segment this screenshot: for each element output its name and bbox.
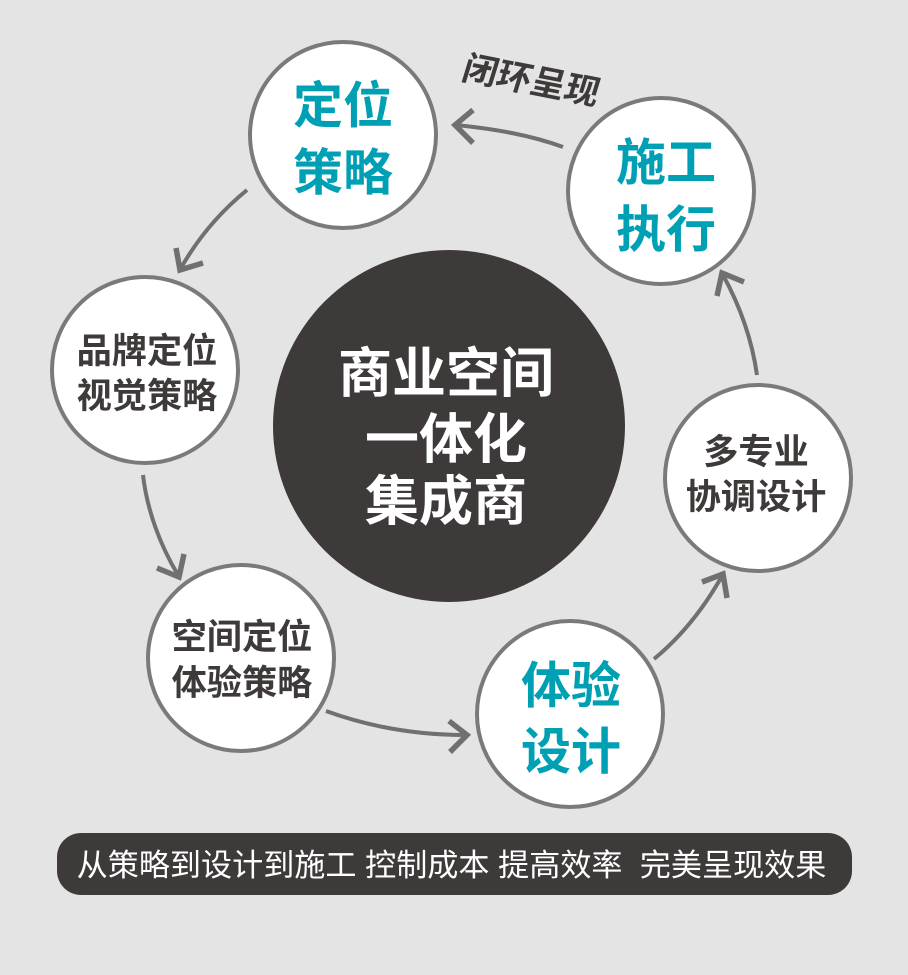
node: 施工执行	[568, 98, 754, 284]
central circle: 商业空间一体化集成商: 集成商	[365, 472, 527, 532]
bottom banner	[57, 833, 852, 895]
node: 品牌定位视觉策略: 品牌定位	[77, 332, 217, 371]
node: 施工执行: 施工	[616, 135, 716, 191]
node: 品牌定位视觉策略	[52, 277, 238, 463]
arrow: 品牌定位 to 空间定位	[143, 475, 184, 577]
central circle: 商业空间一体化集成商: 一体化	[365, 410, 527, 470]
node: 空间定位体验策略: 体验策略	[172, 664, 312, 703]
node: 空间定位体验策略	[148, 565, 334, 751]
node: 空间定位体验策略: 空间定位	[172, 618, 312, 657]
node: 多专业协调设计	[665, 385, 851, 571]
central circle: 商业空间一体化集成商: 商业空间	[338, 344, 554, 404]
node: 定位策略: 策略	[293, 145, 393, 201]
arrow: 体验设计 to 多专业	[654, 574, 727, 659]
node: 体验设计: 体验	[521, 658, 621, 714]
label: 闭环呈现: 闭环呈现	[458, 50, 604, 113]
node: 品牌定位视觉策略: 视觉策略	[77, 377, 217, 416]
node: 定位策略: 定位	[293, 78, 393, 134]
arrow: 空间定位 to 体验设计	[326, 711, 467, 752]
node: 施工执行: 执行	[616, 202, 716, 258]
node: 多专业协调设计: 多专业	[703, 433, 809, 472]
arrow: 多专业 to 施工执行	[717, 273, 757, 375]
arrow: 定位策略 to 品牌定位	[176, 190, 247, 270]
arrow: 施工执行 to 定位策略	[455, 110, 563, 147]
node: 定位策略	[250, 42, 436, 228]
node: 体验设计	[477, 621, 663, 807]
node: 多专业协调设计: 协调设计	[686, 478, 826, 517]
node: 体验设计: 设计	[521, 724, 621, 780]
bottom banner: 从策略到设计到施工 控制成本 提高效率 完美呈现效果	[77, 848, 826, 883]
central circle: 商业空间一体化集成商	[273, 250, 625, 602]
